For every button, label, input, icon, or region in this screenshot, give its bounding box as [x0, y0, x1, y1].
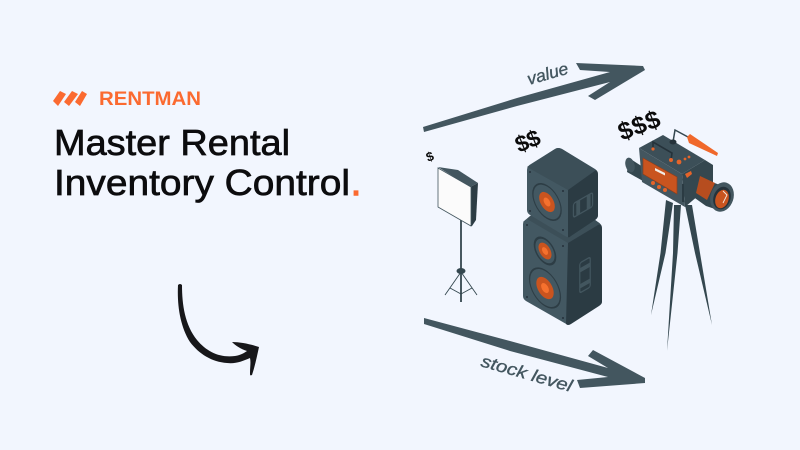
softbox head [438, 167, 478, 187]
title: Master Rental [54, 122, 290, 163]
dollar signs: $$ [511, 124, 544, 158]
logo wordmark: RENTMAN [99, 88, 201, 110]
camera body [639, 135, 713, 207]
arrow: stock level [424, 318, 645, 388]
tripod legs [651, 200, 712, 351]
video camera on tripod [614, 105, 738, 351]
lens [692, 176, 738, 215]
arrow: value [423, 63, 645, 132]
softbox light [424, 148, 478, 302]
microphone [670, 130, 718, 156]
title [54, 122, 361, 203]
softbox stand [445, 220, 477, 302]
dollar signs: $$$ [614, 105, 664, 147]
title: . [351, 162, 361, 203]
control knobs [651, 147, 690, 164]
label: stock level: stock level [479, 352, 576, 396]
curved black arrow [178, 284, 259, 375]
dollar sign: $ [424, 148, 437, 165]
logo: Rentman [53, 88, 201, 110]
icon: logo slashes [53, 91, 87, 106]
top handle [653, 142, 672, 160]
cabinet screws [526, 171, 564, 319]
eyepiece [624, 157, 643, 181]
label: value: value [525, 59, 570, 89]
speaker stack [511, 124, 602, 325]
title: Inventory Control [54, 162, 350, 203]
top speaker cabinet [527, 148, 598, 237]
bottom speaker cabinet [523, 200, 602, 325]
